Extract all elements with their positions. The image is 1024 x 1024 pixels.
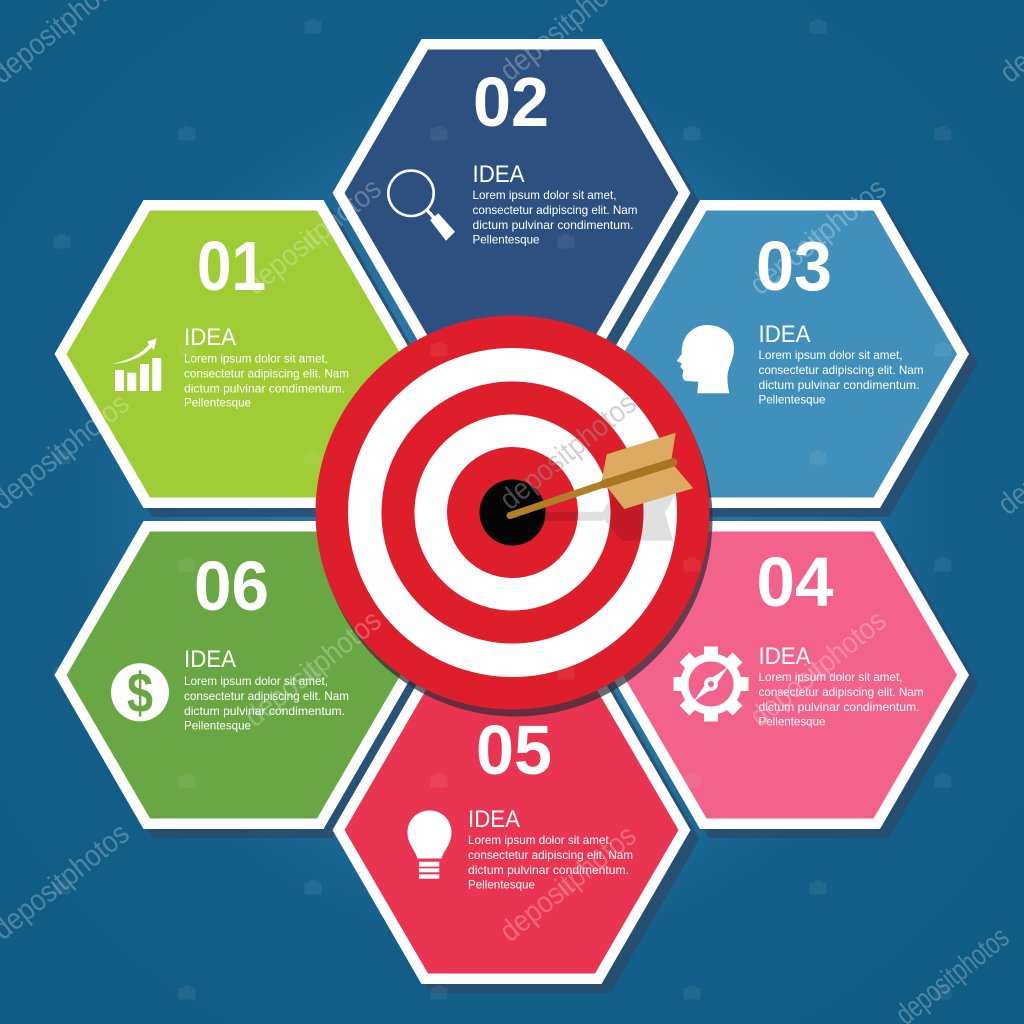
text block 04: Pellentesque (758, 714, 826, 728)
watermark text: depositphotos (239, 172, 388, 301)
text block 02: Lorem ipsum dolor sit amet, (472, 188, 616, 202)
icon: rising bar chart (112, 338, 161, 391)
heading: idea 02: IDEA (472, 161, 524, 188)
watermark text: depositphotos (494, 387, 643, 516)
icon: magnifying glass (388, 171, 455, 241)
text block 03 (758, 348, 924, 406)
number 04: 04 (756, 543, 834, 621)
icon: gear with compass needle (674, 646, 748, 722)
text block 06: consectetur adipiscing elit. Nam (184, 689, 349, 703)
text block 02: dictum pulvinar condimentum. (472, 218, 634, 232)
text block 05 (468, 833, 633, 892)
text block 02: Pellentesque (472, 232, 540, 246)
icon: dollar coin (111, 662, 169, 726)
text block 04: Lorem ipsum dolor sit amet, (758, 670, 902, 684)
text block 03: consectetur adipiscing elit. Nam (758, 363, 924, 377)
text block 05: Pellentesque (468, 878, 535, 892)
text block 05: dictum pulvinar condimentum. (468, 863, 629, 877)
panel 03 (611, 200, 969, 508)
text block 04: consectetur adipiscing elit. Nam (758, 685, 924, 699)
panel 06 (54, 521, 412, 829)
target: bullseye with arrow (316, 316, 712, 716)
text block 04 (758, 670, 924, 728)
watermark text: depositphotos (239, 604, 388, 733)
number 05: 05 (476, 711, 552, 789)
text block 01: Pellentesque (184, 396, 251, 410)
text block 02 (472, 188, 638, 246)
watermark text: depositphotos (744, 604, 893, 733)
panel 02 (332, 39, 690, 347)
number 03: 03 (756, 227, 832, 305)
text block 06: dictum pulvinar condimentum. (184, 704, 345, 718)
panel 04 (611, 521, 969, 829)
panel 05 (332, 676, 690, 984)
heading: idea 01: IDEA (184, 324, 236, 351)
number 02: 02 (473, 63, 549, 141)
text block 06: Lorem ipsum dolor sit amet, (184, 674, 328, 688)
text block 05: consectetur adipiscing elit. Nam (468, 848, 633, 862)
text block 01 (184, 352, 349, 410)
text block 03: dictum pulvinar condimentum. (758, 378, 920, 392)
text block 04: dictum pulvinar condimentum. (758, 700, 920, 714)
number 01: 01 (197, 227, 266, 305)
heading: idea 03: IDEA (758, 321, 810, 348)
text block 06 (184, 674, 349, 732)
icon: head profile (677, 325, 734, 393)
panel 01 (54, 200, 412, 508)
text block 06: Pellentesque (184, 718, 251, 732)
text block 03: Pellentesque (758, 392, 826, 406)
text block 05: Lorem ipsum dolor sit amet, (468, 833, 612, 847)
watermark text: depositphotos (494, 819, 643, 948)
watermark text: depositphotos (744, 172, 893, 301)
icon: dollar coin: $ (127, 662, 153, 726)
heading: idea 05: IDEA (468, 806, 520, 833)
text block 03: Lorem ipsum dolor sit amet, (758, 348, 902, 362)
arrow shadow (510, 495, 675, 541)
text block 02: consectetur adipiscing elit. Nam (472, 203, 638, 217)
text block 01: Lorem ipsum dolor sit amet, (184, 352, 328, 366)
number 06: 06 (194, 547, 269, 625)
arrow (510, 433, 693, 516)
heading: idea 04: IDEA (758, 643, 810, 670)
text block 01: consectetur adipiscing elit. Nam (184, 366, 349, 380)
heading: idea 06: IDEA (184, 646, 236, 673)
icon: light bulb (408, 810, 452, 879)
text block 01: dictum pulvinar condimentum. (184, 382, 345, 396)
